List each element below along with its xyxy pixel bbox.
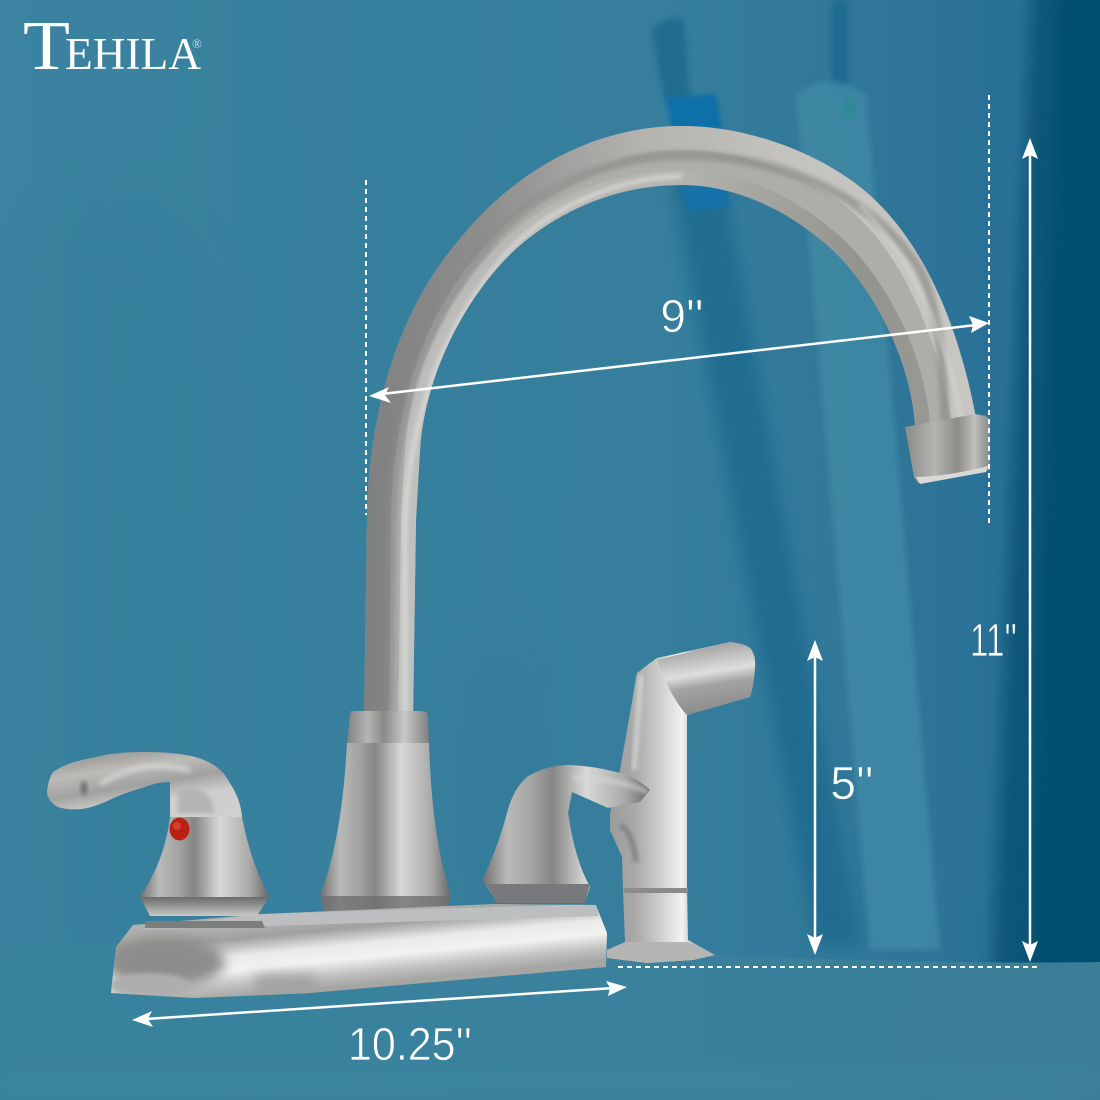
right handle bbox=[482, 765, 650, 903]
faucet bbox=[47, 110, 1000, 1005]
nozzle bbox=[905, 414, 990, 483]
dimension: 11 inch height bbox=[970, 138, 1038, 962]
dimension: 5 inch sprayer height: 5'' bbox=[830, 757, 874, 809]
dimension: 9 inch spout reach: 9'' bbox=[660, 290, 704, 342]
dimension: 10.25 inch base width bbox=[132, 981, 627, 1070]
side sprayer bbox=[607, 642, 755, 963]
spout bbox=[364, 126, 976, 711]
logo: Tehila: EHILA bbox=[65, 29, 201, 79]
dashed guides bbox=[366, 95, 1040, 967]
dimension: 5 inch sprayer height bbox=[807, 640, 874, 955]
base plate bbox=[111, 904, 607, 998]
logo: Tehila bbox=[23, 8, 202, 85]
logo: Tehila: T bbox=[23, 8, 70, 85]
left handle bbox=[47, 752, 269, 928]
dimension: 9 inch spout reach bbox=[369, 290, 989, 403]
dimension: 11 inch height: 11'' bbox=[970, 614, 1017, 666]
dimension: 10.25 inch base width: 10.25'' bbox=[348, 1018, 472, 1070]
centre body bbox=[347, 711, 429, 743]
logo: Tehila: ® bbox=[192, 36, 202, 51]
